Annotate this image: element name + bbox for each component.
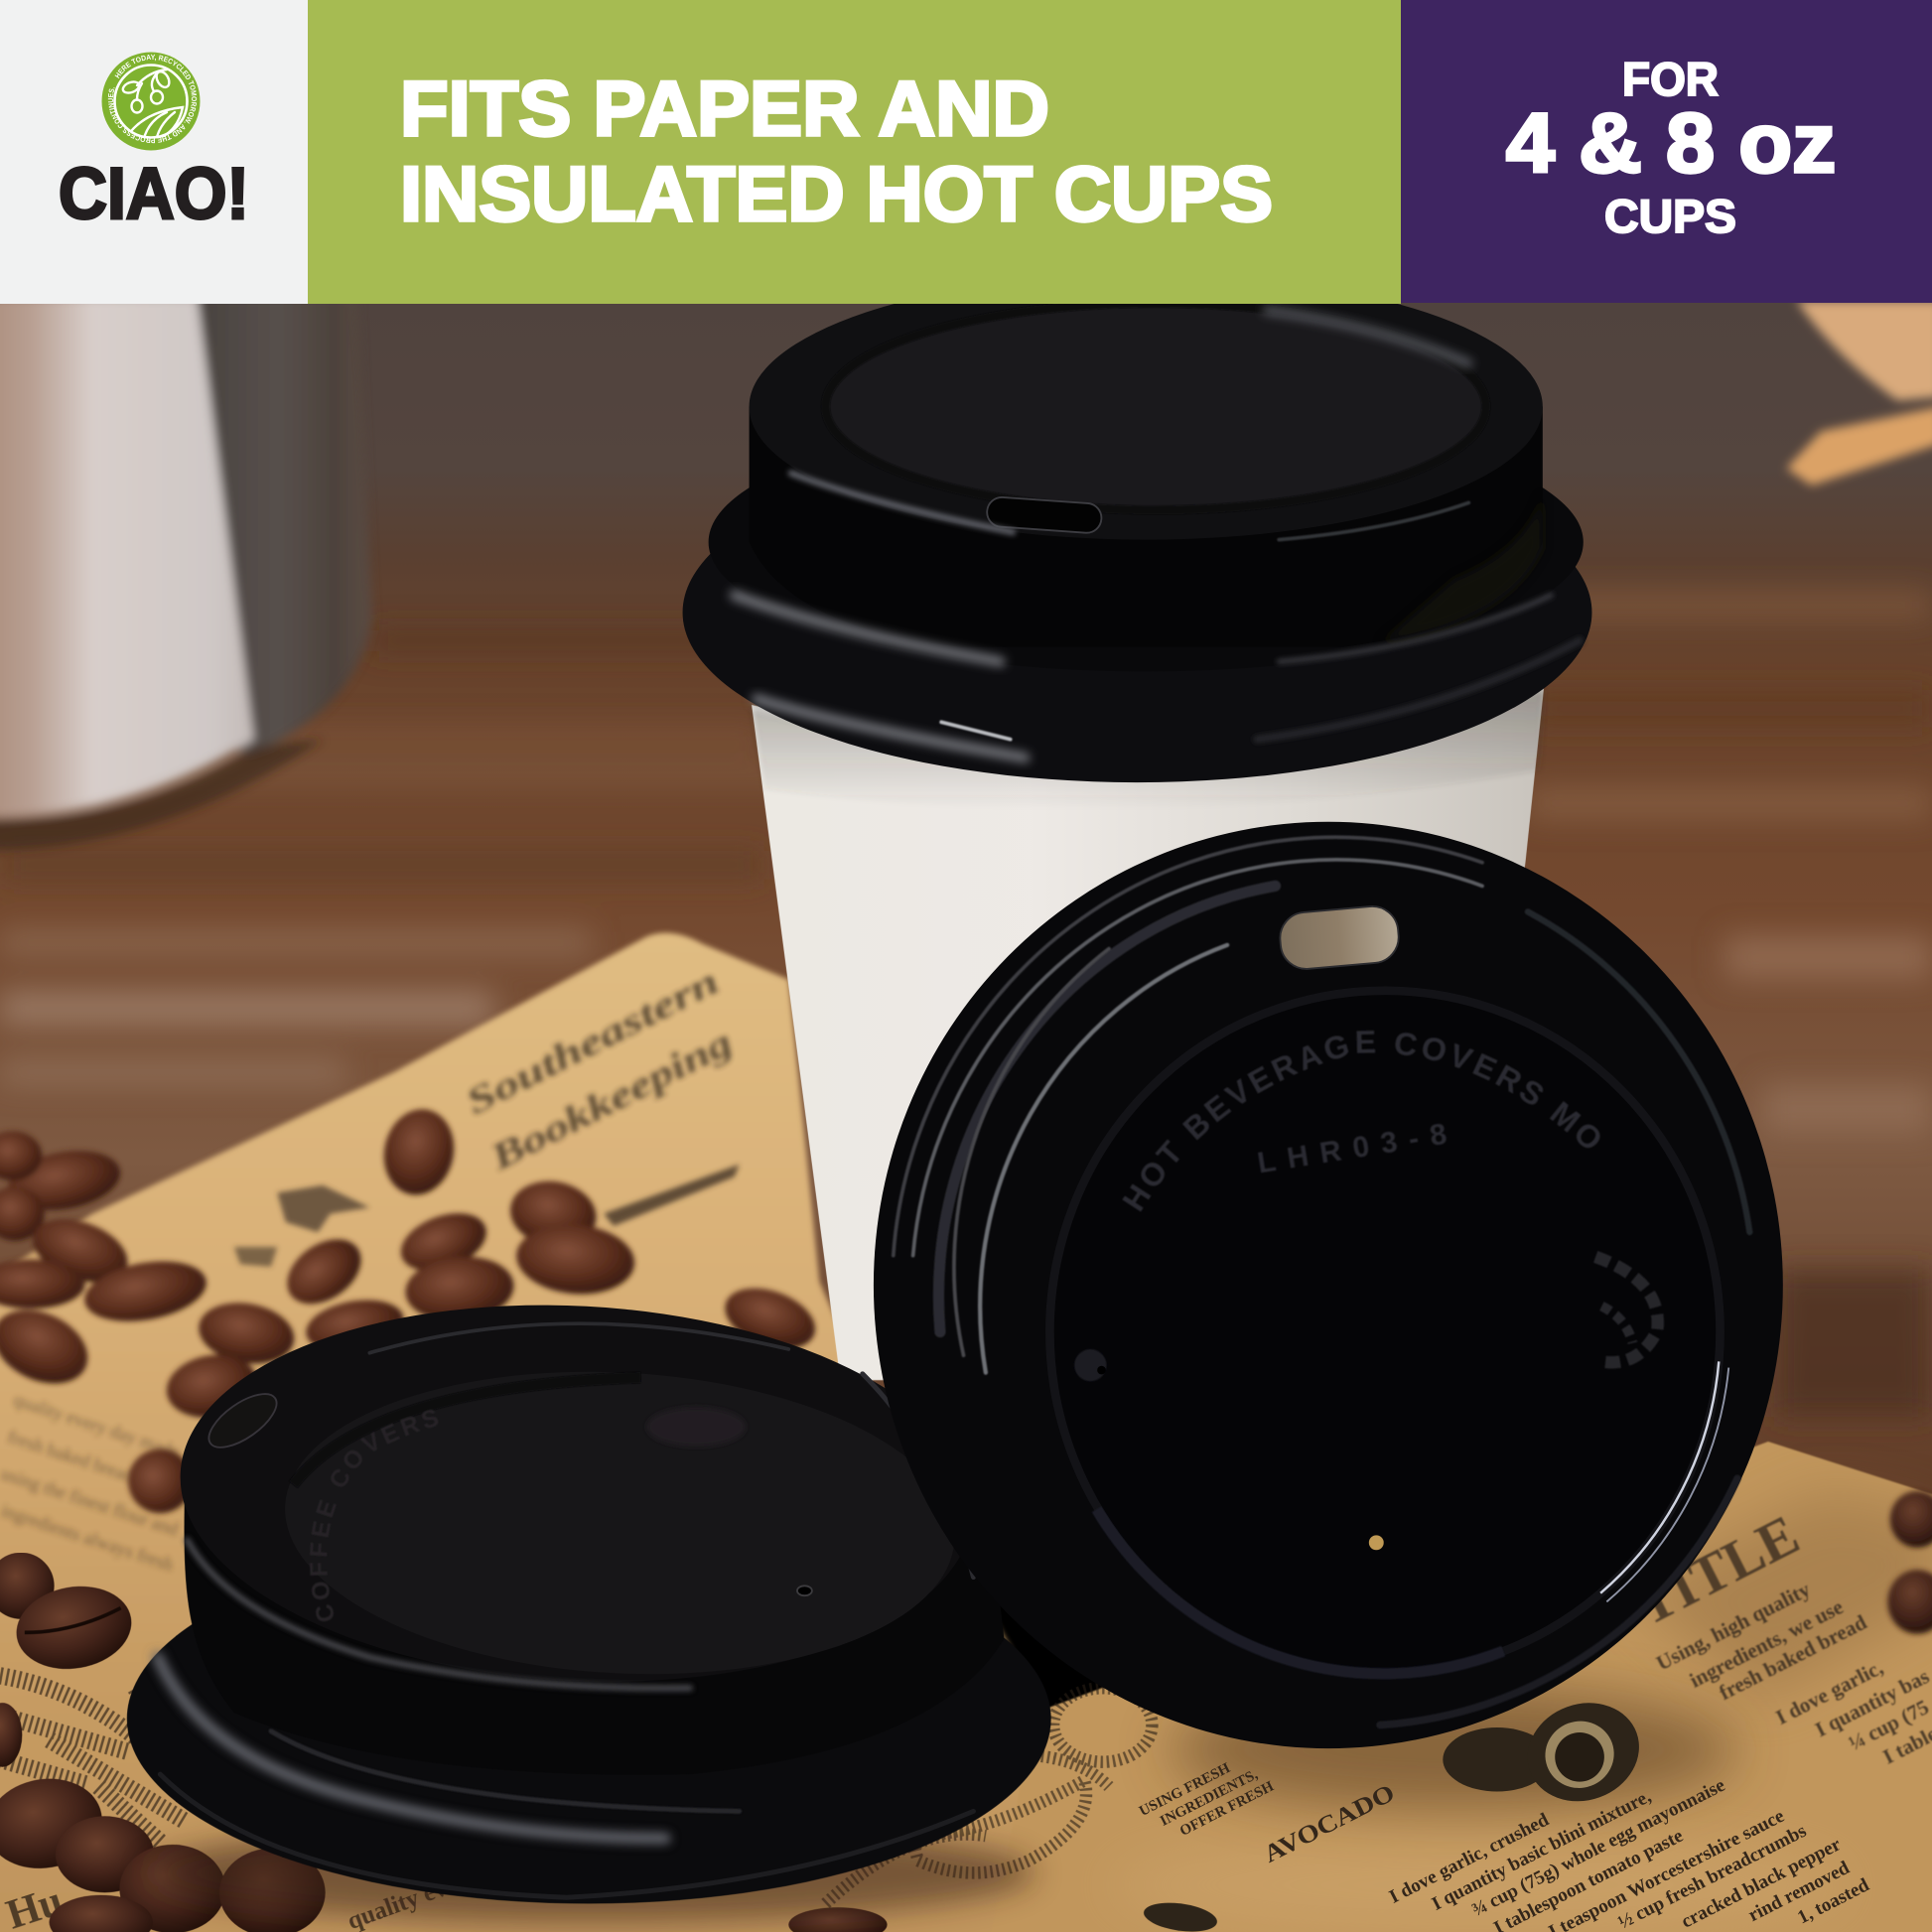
shadow under flat lid <box>148 1824 1035 1922</box>
TITLE word: TITLE <box>1626 1503 1809 1638</box>
headline <box>400 65 1273 237</box>
sip slot <box>1278 904 1401 971</box>
blurred heading on paper: Bookkeeping <box>483 1022 739 1179</box>
size panel <box>1401 0 1932 303</box>
headline panel <box>308 0 1401 304</box>
concentric gloss rings <box>894 837 1749 1725</box>
embossed model number: LHR03-8 <box>1255 1118 1449 1179</box>
sip slot <box>986 496 1102 534</box>
ingredient list: I dove garlic, crushed <box>1386 1809 1553 1908</box>
recipe intro: I quantity bas <box>1811 1664 1932 1741</box>
small print rows left: ingredients always fresh <box>0 1500 177 1576</box>
blurred printed mark <box>234 1165 740 1267</box>
coffee beans near group <box>0 1491 1932 1932</box>
white paper cup <box>752 688 1544 1380</box>
lid top surface <box>171 1286 983 1701</box>
ingredient list: ¾ cup (75g) whole egg mayonnaise <box>1468 1775 1728 1921</box>
headline: FITS PAPER AND <box>400 65 1049 152</box>
ingredient list: ½ cup fresh breadcrumbs <box>1615 1820 1810 1932</box>
small print rows left: using the finest flour and <box>0 1463 182 1541</box>
embossed recycling mark <box>1595 1257 1658 1362</box>
small print rows left <box>0 1390 182 1576</box>
blurred heading on paper: Southeastern <box>460 961 726 1123</box>
etched illustrations on paper <box>0 1676 1152 1903</box>
small heading block: INGREDIENTS, <box>1158 1766 1261 1830</box>
small heading block: OFFER FRESH <box>1177 1778 1277 1840</box>
recipe intro: I dove garlic, <box>1772 1655 1886 1729</box>
lid outer disc <box>874 822 1783 1748</box>
size text <box>1506 53 1836 242</box>
flange <box>127 1534 1051 1903</box>
side wall <box>185 1478 1004 1775</box>
inner panel <box>1049 991 1721 1673</box>
newspaper sheet upper <box>0 933 1601 1932</box>
outer flange <box>683 443 1591 782</box>
bright inner ring arc <box>1600 1361 1728 1601</box>
recipe intro: ingredients, we use <box>1686 1594 1847 1693</box>
recipe intro: Using, high quality <box>1652 1577 1815 1675</box>
top rim <box>750 274 1543 540</box>
size text: FOR <box>1622 53 1719 105</box>
avocado illustration <box>1443 1688 1653 1817</box>
ingredient list: I quantity basic blini mixture, <box>1429 1786 1655 1915</box>
white sleeve <box>0 296 254 818</box>
small print rows left: fresh baked bread daily <box>5 1427 176 1500</box>
etched leaf bottom <box>1142 1898 1219 1932</box>
brand panel <box>0 0 308 304</box>
small print rows left: quality every day made <box>11 1390 182 1462</box>
lid lying flat <box>87 1245 1051 1932</box>
header band <box>0 0 1932 304</box>
blurred steel cup in background <box>0 296 372 850</box>
icon: recycled olive badge: HERE TODAY, RECYCLED TOMORROW. AND THE PROCESS CONTINUES. <box>107 54 197 143</box>
embossed dot <box>1074 1349 1106 1381</box>
small heading block: USING FRESH <box>1137 1760 1233 1820</box>
recipe intro: fresh baked bread <box>1716 1610 1870 1705</box>
fragment text lower left <box>1 1863 483 1932</box>
coffee beans far group <box>0 1103 823 1522</box>
recess <box>277 1355 962 1691</box>
gloss highlights <box>735 311 1580 758</box>
steel body <box>185 296 372 755</box>
ingredient list: 1, toasted <box>1794 1874 1872 1928</box>
vent hole <box>797 1586 812 1595</box>
blurred object top right <box>1787 301 1932 485</box>
lid on top of cup <box>683 274 1591 782</box>
sip slot <box>201 1384 285 1457</box>
wooden table background <box>0 296 1932 1528</box>
recess <box>826 303 1486 510</box>
recipe intro: ¼ cup (75 <box>1845 1695 1932 1755</box>
middle flange <box>709 413 1584 671</box>
small heading block <box>1137 1760 1277 1840</box>
ingredient list: rind removed <box>1745 1858 1854 1926</box>
printed recipe text <box>1 1503 1932 1932</box>
size text: 4 & 8 oz <box>1506 96 1836 190</box>
blurred heading on paper <box>460 961 739 1179</box>
size text: CUPS <box>1604 190 1736 242</box>
embossed marks: COFFEE COVERS <box>310 1410 438 1622</box>
headline: INSULATED HOT CUPS <box>400 150 1273 237</box>
brand name: CIAO! <box>59 154 249 234</box>
avocado heading: AVOCADO <box>1260 1779 1399 1868</box>
upper wall <box>750 407 1543 647</box>
newspaper sheet lower right <box>986 1442 1932 1932</box>
vent hole <box>1369 1535 1384 1550</box>
recipe intro <box>1652 1577 1932 1769</box>
ingredient list: cracked black pepper <box>1678 1834 1845 1932</box>
ingredient list <box>1386 1775 1872 1932</box>
gloss highlights <box>158 1323 973 1897</box>
